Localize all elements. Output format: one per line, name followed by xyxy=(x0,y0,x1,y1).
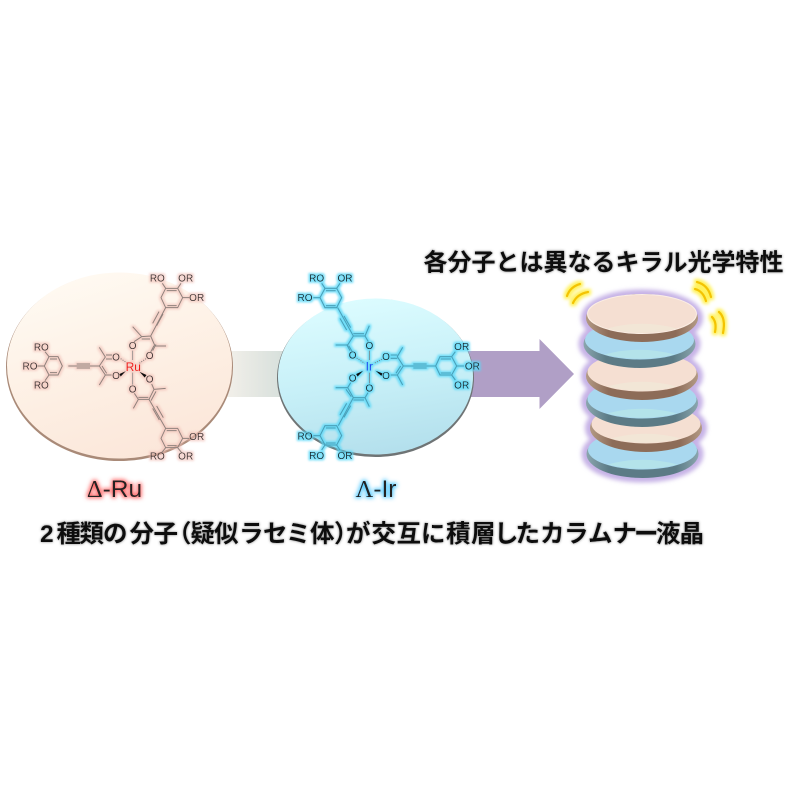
atom labels: OR xyxy=(189,293,204,304)
upper ligand bonds xyxy=(313,283,369,351)
atom labels: O xyxy=(112,352,120,363)
atom labels xyxy=(298,274,480,462)
atom labels: RO xyxy=(309,451,324,462)
atom labels: RO xyxy=(309,274,324,285)
disc 6 blue xyxy=(586,430,698,478)
atom labels: O xyxy=(146,351,154,362)
icon: left vibration marks xyxy=(567,284,588,303)
atom labels: OR xyxy=(178,451,193,462)
atom labels: OR xyxy=(178,274,193,285)
disc 3 peach xyxy=(586,352,698,400)
purple halo xyxy=(584,294,702,478)
stack: alternating discs xyxy=(584,294,702,478)
lower ligand bonds xyxy=(313,383,369,450)
atom labels: OR xyxy=(454,380,469,391)
metal-oxygen bonds xyxy=(131,351,134,385)
panel: Ir disc xyxy=(277,298,474,457)
atom labels: OR xyxy=(465,361,480,372)
atom labels: RO xyxy=(298,293,313,304)
atom labels: OR xyxy=(189,432,204,443)
atom labels: O xyxy=(129,341,137,352)
left ligand bonds xyxy=(37,347,112,385)
atom labels: Ir xyxy=(366,359,373,373)
atom labels: O xyxy=(365,341,373,352)
atom labels: OR xyxy=(454,342,469,353)
atom labels: O xyxy=(349,374,357,385)
atom labels: O xyxy=(382,352,390,363)
upper ligand bonds xyxy=(133,283,189,352)
disc 2 blue xyxy=(584,320,696,368)
right ligand bonds xyxy=(391,347,464,385)
atom labels: RO xyxy=(34,381,49,392)
metal-oxygen bonds xyxy=(368,351,371,383)
atom labels xyxy=(23,274,204,462)
atom labels: O xyxy=(112,371,120,382)
molecule: delta-Ru complex xyxy=(23,274,204,462)
atom labels: O xyxy=(382,371,390,382)
disc 5 peach xyxy=(590,404,702,452)
caption: columnar liquid crystal: 2種類の分子（疑似ラセミ体）が交互に積層したカラムナー液晶 xyxy=(40,519,704,548)
panel: Ru disc xyxy=(6,272,233,461)
disc 4 blue xyxy=(586,379,698,427)
atom labels: OR xyxy=(338,274,352,285)
atom labels: O xyxy=(129,384,137,395)
atom labels: RO xyxy=(34,343,49,354)
molecule: lambda-Ir complex xyxy=(298,274,480,462)
heading: chiroptical property: 各分子とは異なるキラル光学特性 xyxy=(424,248,784,276)
label: delta-Ru: Δ-Ru xyxy=(87,476,142,503)
label: lambda-Ir: Λ-Ir xyxy=(356,476,396,503)
icon: right vibration marks xyxy=(695,282,724,333)
atom labels: O xyxy=(349,350,357,361)
atom labels: O xyxy=(146,375,154,386)
atom labels: RO xyxy=(23,362,38,373)
disc 1 peach xyxy=(586,294,698,342)
lower ligand bonds xyxy=(133,384,189,453)
atom labels: RO xyxy=(298,431,313,442)
atom labels: O xyxy=(365,383,373,394)
atom labels: OR xyxy=(338,451,352,462)
atom labels: RO xyxy=(150,274,165,285)
atom labels: RO xyxy=(150,451,165,462)
atom labels: Ru xyxy=(126,360,141,374)
arrow: purple block arrow xyxy=(465,339,574,409)
band: grey connector between discs xyxy=(225,351,285,397)
